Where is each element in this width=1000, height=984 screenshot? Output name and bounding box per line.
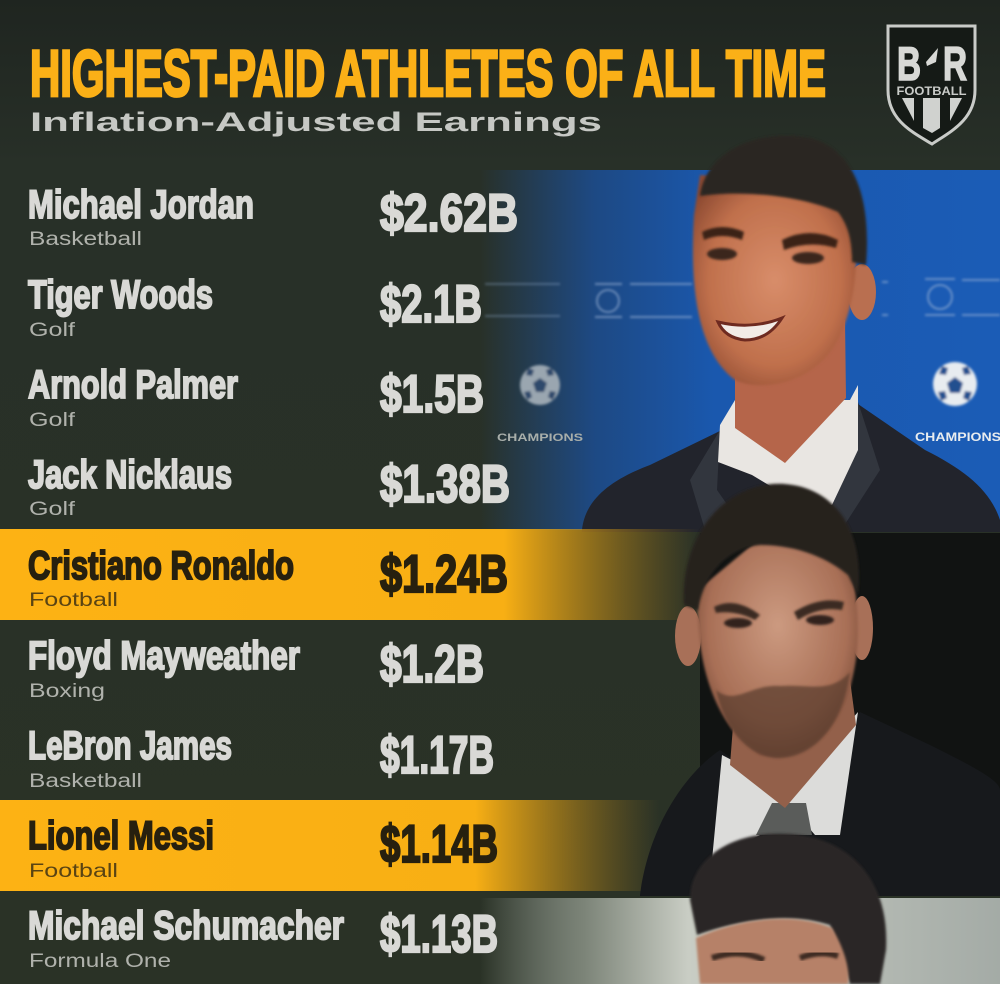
row: Floyd Mayweather: Floyd Mayweather [28, 634, 300, 678]
row: Cristiano Ronaldo: $1.24B [380, 545, 508, 604]
backdrop label: CHAMPIONS [497, 432, 583, 444]
row: Michael Schumacher: Formula One [29, 951, 171, 972]
dark backdrop [700, 533, 1000, 896]
shirt [712, 712, 858, 860]
row: LeBron James [28, 724, 494, 792]
row: LeBron James: LeBron James [28, 724, 232, 768]
row: Michael Jordan: Michael Jordan [28, 183, 254, 227]
face [693, 175, 857, 385]
eyes and brows [714, 600, 844, 628]
tie [756, 803, 812, 835]
row: Lionel Messi: $1.14B [380, 815, 498, 874]
logo: B/R Football shield: R [943, 37, 967, 90]
blue backdrop [480, 170, 1000, 530]
photo panel: Ronaldo on blue backdrop [480, 136, 1000, 532]
backdrop ball right [933, 362, 977, 406]
row: Arnold Palmer: $1.5B [380, 365, 484, 424]
ear [848, 264, 876, 320]
logo: B/R Football shield [888, 26, 975, 144]
row: Tiger Woods: Tiger Woods [28, 273, 213, 317]
eyes and brows [702, 227, 838, 264]
highlight band: Ronaldo [0, 529, 700, 620]
suit [582, 402, 1000, 532]
neck [730, 680, 856, 808]
lapels [690, 402, 880, 532]
row: Michael Schumacher: Michael Schumacher [28, 904, 344, 948]
brows [712, 953, 838, 960]
row: Arnold Palmer [28, 363, 484, 431]
photo panel: Messi on dark backdrop [640, 484, 1000, 896]
row: Michael Schumacher [28, 904, 498, 972]
hair [684, 484, 859, 610]
row: Cristiano Ronaldo [28, 544, 508, 611]
backdrop logos [485, 279, 1000, 317]
row: Cristiano Ronaldo: Football [29, 590, 118, 611]
suit [640, 712, 1000, 896]
row: Michael Schumacher: $1.13B [380, 905, 498, 964]
neck [735, 320, 846, 463]
row: Lionel Messi: Lionel Messi [28, 814, 214, 858]
row: Tiger Woods: Golf [29, 320, 76, 341]
hair [690, 834, 886, 984]
face [698, 530, 858, 757]
row: Jack Nicklaus: $1.38B [380, 455, 510, 514]
row: Michael Jordan: Basketball [29, 229, 142, 250]
row: Arnold Palmer: Golf [29, 410, 76, 431]
logo: B/R Football shield: B [897, 37, 921, 90]
logo: B/R Football shield: FOOTBALL [896, 86, 966, 98]
face [696, 919, 848, 984]
row: LeBron James: $1.17B [380, 726, 494, 785]
hair [700, 136, 867, 265]
row: Tiger Woods [28, 273, 482, 341]
row: Floyd Mayweather: $1.2B [380, 635, 484, 694]
row: Lionel Messi: Football [29, 861, 118, 882]
row: Cristiano Ronaldo: Cristiano Ronaldo [28, 544, 294, 588]
row: Jack Nicklaus: Jack Nicklaus [28, 453, 232, 497]
mouth [718, 318, 782, 340]
row: Lionel Messi [28, 814, 498, 882]
shirt [718, 385, 858, 505]
beard [716, 672, 850, 758]
row: Arnold Palmer: Arnold Palmer [28, 363, 238, 407]
row: Jack Nicklaus [28, 453, 510, 520]
subtitle: Inflation-Adjusted Earnings [30, 107, 602, 137]
row: LeBron James: Basketball [29, 771, 142, 792]
row: Michael Jordan [28, 183, 518, 250]
ears [675, 606, 701, 666]
photo panel: Ronaldo on blue backdrop: CHAMPIONS [915, 430, 1000, 444]
pale backdrop [480, 898, 1000, 984]
highlight band: Messi [0, 800, 660, 891]
backdrop ball left [520, 365, 560, 405]
row: Floyd Mayweather: Boxing [29, 681, 105, 702]
row: Tiger Woods: $2.1B [380, 275, 482, 334]
row: Jack Nicklaus: Golf [29, 499, 76, 520]
row: Michael Jordan: $2.62B [380, 184, 518, 243]
photo panel: third athlete on pale backdrop [480, 834, 1000, 984]
row: Floyd Mayweather [28, 634, 484, 702]
